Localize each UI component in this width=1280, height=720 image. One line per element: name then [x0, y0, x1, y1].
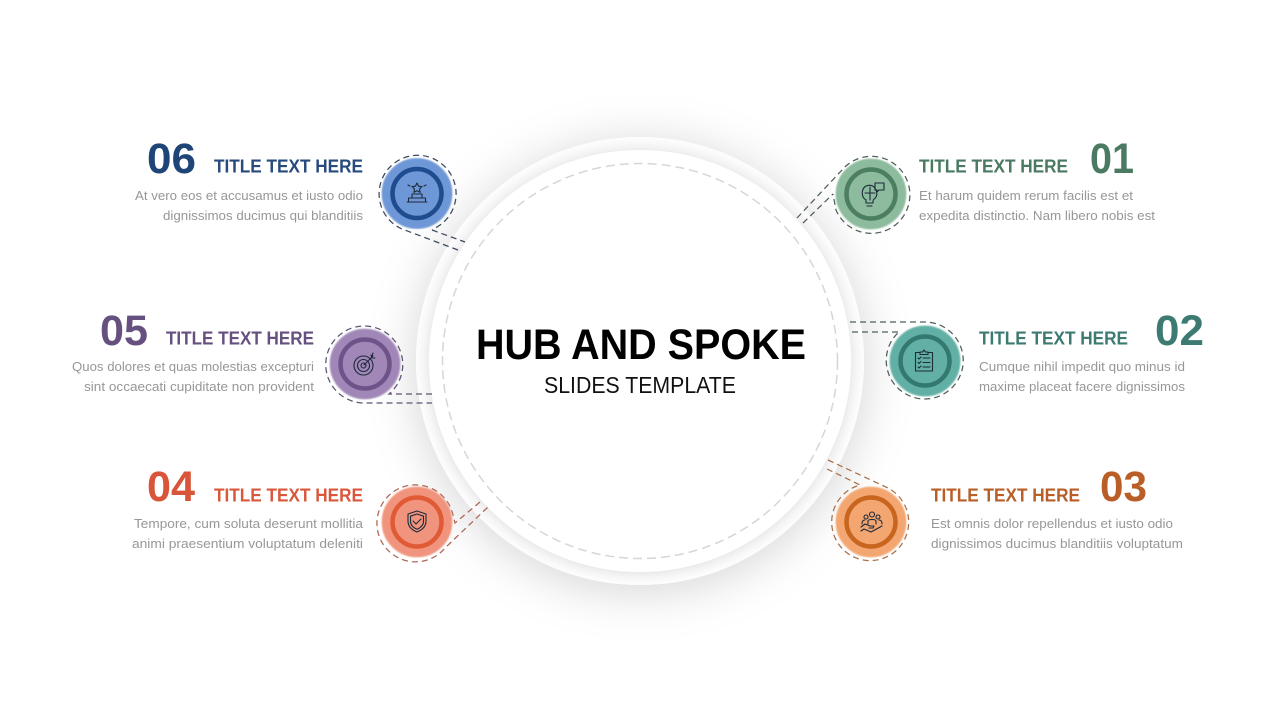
icon: shield with check: [408, 511, 426, 532]
item 06 body: At vero eos et accusamus et iusto odio: [135, 189, 363, 203]
item 04: [132, 463, 488, 562]
item 02: [850, 307, 1204, 399]
item 02 disc: [890, 326, 960, 396]
item 02 body: maxime placeat facere dignissimos: [979, 380, 1185, 394]
item 02 body: [979, 360, 1185, 394]
item 02 body: Cumque nihil impedit quo minus id: [979, 360, 1185, 374]
item 03 disc: [836, 487, 906, 557]
item 06 title: TITLE TEXT HERE: [214, 156, 363, 176]
hub dashed ring: [442, 164, 838, 558]
item 04 body: [132, 517, 363, 551]
item 05 body: Quos dolores et quas molestias excepturi: [72, 360, 314, 374]
item 03 body: dignissimos ducimus blanditiis voluptatum: [931, 537, 1183, 551]
item 05: [72, 307, 432, 403]
item 02 ring: [900, 336, 950, 386]
item 05 number: 05: [100, 307, 148, 355]
item 02 title: TITLE TEXT HERE: [979, 328, 1128, 348]
item 04 connector and dashed outline: [377, 485, 488, 562]
item 03 ring: [846, 498, 896, 546]
item 03 body: [931, 517, 1183, 551]
item 06 ring: [392, 169, 442, 218]
item 01 disc: [836, 159, 906, 229]
item 04 disc: [382, 487, 452, 557]
item 06 body: [135, 189, 363, 223]
item 01 body: Et harum quidem rerum facilis est et: [919, 189, 1134, 203]
item 01: [797, 135, 1156, 233]
item 02 number: 02: [1155, 307, 1204, 355]
item 06 number: 06: [147, 135, 196, 183]
item 04 title: TITLE TEXT HERE: [214, 484, 363, 506]
icon: target with arrow: [354, 353, 375, 375]
item 03 title: TITLE TEXT HERE: [931, 484, 1080, 506]
item 06: [135, 135, 465, 250]
item 01 body: expedita distinctio. Nam libero nobis est: [919, 209, 1156, 223]
item 01 connector and dashed outline: [797, 156, 910, 233]
icon: clipboard checklist: [916, 350, 932, 371]
item 05 body: [72, 360, 315, 394]
central hub: [416, 137, 864, 585]
item 06 disc: [382, 158, 452, 228]
item 03 connector and dashed outline: [827, 460, 909, 561]
item 05 disc: [330, 329, 400, 399]
item 05 title: TITLE TEXT HERE: [166, 328, 314, 348]
item 06 connector and dashed outline: [379, 155, 465, 250]
icon: hand holding people: [861, 512, 882, 532]
item 04 ring: [392, 498, 442, 546]
item 06 body: dignissimos ducimus qui blanditiis: [163, 209, 363, 223]
icon: light bulb with speech bubble: [862, 183, 884, 206]
item 01 title: TITLE TEXT HERE: [919, 156, 1068, 176]
icon: podium with star: [407, 183, 427, 202]
item 02 connector and dashed outline: [850, 322, 963, 399]
item 03 number: 03: [1100, 463, 1147, 511]
item 04 body: Tempore, cum soluta deserunt mollitia: [134, 517, 363, 531]
item 05 body: sint occaecati cupiditate non provident: [84, 380, 315, 394]
item 01 number: 01: [1090, 135, 1134, 183]
item 04 number: 04: [147, 463, 195, 511]
hub outer ring: [416, 137, 864, 585]
item 04 body: animi praesentium voluptatum deleniti: [132, 537, 363, 551]
item 03: [827, 460, 1183, 561]
item 03 body: Est omnis dolor repellendus et iusto odio: [931, 517, 1173, 531]
hub inner disc: [429, 150, 851, 572]
item 05 ring: [340, 340, 390, 388]
item 01 ring: [846, 170, 896, 218]
item 05 connector and dashed outline: [326, 326, 432, 403]
hub title: HUB AND SPOKE: [476, 321, 806, 369]
hub subtitle: SLIDES TEMPLATE: [544, 372, 736, 398]
item 01 body: [919, 189, 1156, 223]
